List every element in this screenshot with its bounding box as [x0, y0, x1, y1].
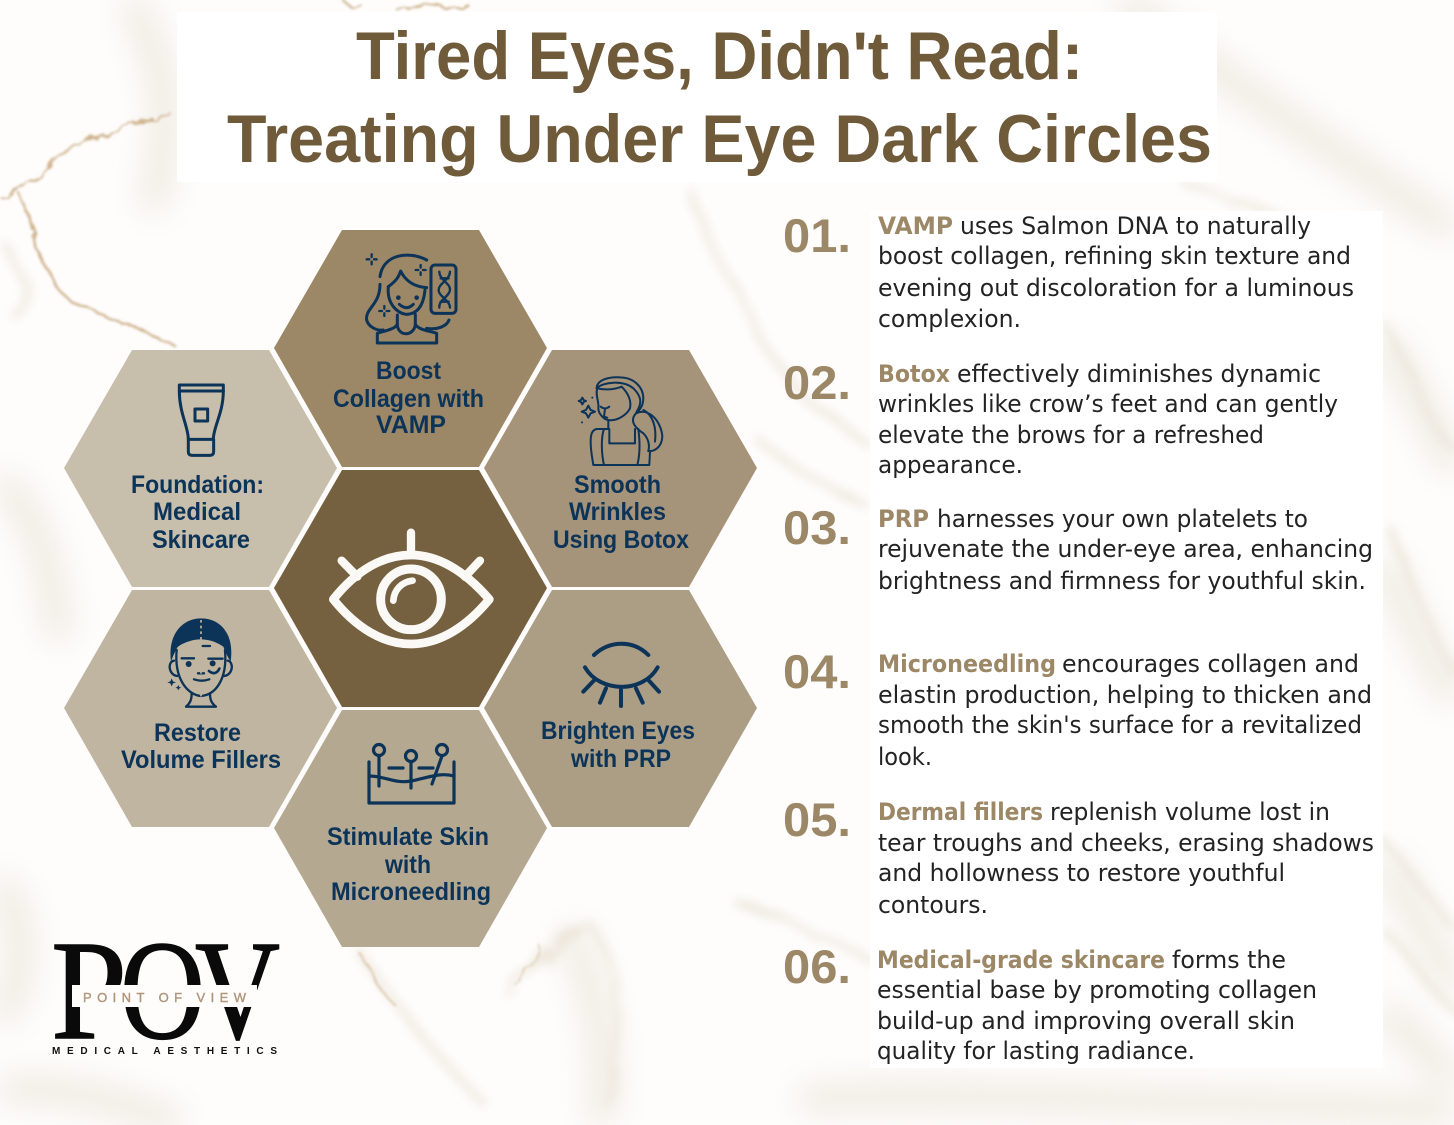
item 04: elastin production, helping to thicken and: [878, 681, 1372, 709]
label: Volume Fillers: [121, 746, 281, 774]
title: Treating Under Eye Dark Circles: [227, 101, 1212, 177]
logo: POV Medical Aesthetics: MEDICAL AESTHETICS: [52, 1046, 277, 1057]
label: with: [384, 851, 431, 879]
item 02: [783, 356, 1338, 479]
label: [333, 357, 484, 439]
label: [541, 717, 695, 773]
item 03: PRP: [878, 505, 929, 533]
item 01: [783, 209, 1354, 333]
item 05: 05.: [783, 793, 851, 846]
title: [227, 18, 1212, 177]
label: Foundation:: [131, 471, 264, 499]
item 01: complexion.: [878, 305, 1021, 333]
label: Smooth: [574, 471, 661, 499]
item 03: rejuvenate the under-eye area, enhancing: [878, 535, 1373, 563]
item 04: [783, 645, 1372, 771]
hexagon: Smooth Wrinkles Using Botox: [484, 350, 757, 587]
icon: half-aged face: [167, 618, 232, 707]
item 02: appearance.: [878, 451, 1023, 479]
item 05: and hollowness to restore youthful: [878, 859, 1285, 887]
item 03: brightness and firmness for youthful skin.: [878, 567, 1366, 595]
icon: closed eye: [583, 644, 659, 706]
label: Using Botox: [553, 526, 689, 554]
item 06: Medical-grade skincare: [877, 946, 1165, 974]
item 02: effectively diminishes dynamic: [957, 360, 1321, 388]
label: Wrinkles: [569, 498, 666, 526]
item 05: replenish volume lost in: [1050, 798, 1330, 826]
label: VAMP: [376, 411, 446, 439]
icon: woman with DNA phone: [367, 254, 456, 343]
item 04: encourages collagen and: [1062, 650, 1359, 678]
icon: microneedling tray: [369, 744, 454, 803]
label: Collagen with: [333, 385, 484, 413]
item 03: [783, 501, 1373, 595]
item 03: harnesses your own platelets to: [937, 505, 1308, 533]
label: [327, 823, 491, 906]
item 06: forms the: [1172, 946, 1286, 974]
white backing panel: title: [177, 12, 1217, 182]
label: Microneedling: [331, 878, 491, 906]
logo: POV Medical Aesthetics: O: [120, 911, 205, 1069]
hexagon: center eye: [274, 470, 547, 707]
logo: POV Medical Aesthetics: [51, 911, 280, 1069]
item 05: Dermal fillers: [878, 798, 1043, 826]
item 04: Microneedling: [878, 650, 1056, 678]
item 04: smooth the skin's surface for a revitalized: [878, 711, 1362, 739]
item 05: contours.: [878, 891, 988, 919]
item 01: boost collagen, refining skin texture and: [878, 242, 1351, 270]
label: [121, 719, 281, 774]
logo: POV Medical Aesthetics: V: [195, 911, 280, 1069]
item 04: 04.: [783, 645, 851, 698]
item 02: 02.: [783, 356, 851, 409]
hexagon: Boost Collagen with VAMP: [274, 230, 547, 467]
hexagon: Foundation Medical Skincare: [64, 350, 337, 587]
label: [131, 471, 264, 554]
label: [553, 471, 689, 554]
item 01: VAMP: [878, 212, 953, 240]
item 02: elevate the brows for a refreshed: [878, 421, 1264, 449]
hexagon: Brighten Eyes with PRP: [484, 590, 757, 827]
label: Boost: [376, 357, 442, 385]
label: Restore: [154, 719, 241, 747]
item 02: wrinkles like crow’s feet and can gently: [878, 390, 1338, 418]
icon: skincare tube: [179, 385, 223, 455]
item 06: essential base by promoting collagen: [877, 976, 1317, 1004]
item 02: Botox: [878, 360, 950, 388]
item 01: 01.: [783, 209, 851, 262]
label: Stimulate Skin: [327, 823, 489, 851]
item 06: build-up and improving overall skin: [877, 1007, 1295, 1035]
label: Medical: [153, 498, 241, 526]
item 06: [783, 940, 1317, 1065]
hexagon: Stimulate Skin with Microneedling: [274, 710, 547, 947]
item 01: uses Salmon DNA to naturally: [960, 212, 1311, 240]
label: Skincare: [152, 526, 250, 554]
item 06: quality for lasting radiance.: [877, 1037, 1195, 1065]
label: with PRP: [570, 745, 671, 773]
item 05: [783, 793, 1374, 919]
logo: POV Medical Aesthetics: POINT OF VIEW: [83, 990, 247, 1005]
logo: POV Medical Aesthetics: P: [51, 911, 127, 1069]
label: Brighten Eyes: [541, 717, 695, 745]
item 04: look.: [878, 743, 932, 771]
item 01: evening out discoloration for a luminous: [878, 274, 1354, 302]
item 03: 03.: [783, 501, 851, 554]
icon: open eye: [333, 533, 489, 644]
item 05: tear troughs and cheeks, erasing shadows: [878, 829, 1374, 857]
title: Tired Eyes, Didn't Read:: [356, 18, 1083, 94]
item 06: 06.: [783, 940, 851, 993]
white backing panel: descriptions: [870, 211, 1383, 1068]
icon: woman with ponytail: [579, 377, 662, 465]
hexagon: Restore Volume Fillers: [64, 590, 337, 827]
